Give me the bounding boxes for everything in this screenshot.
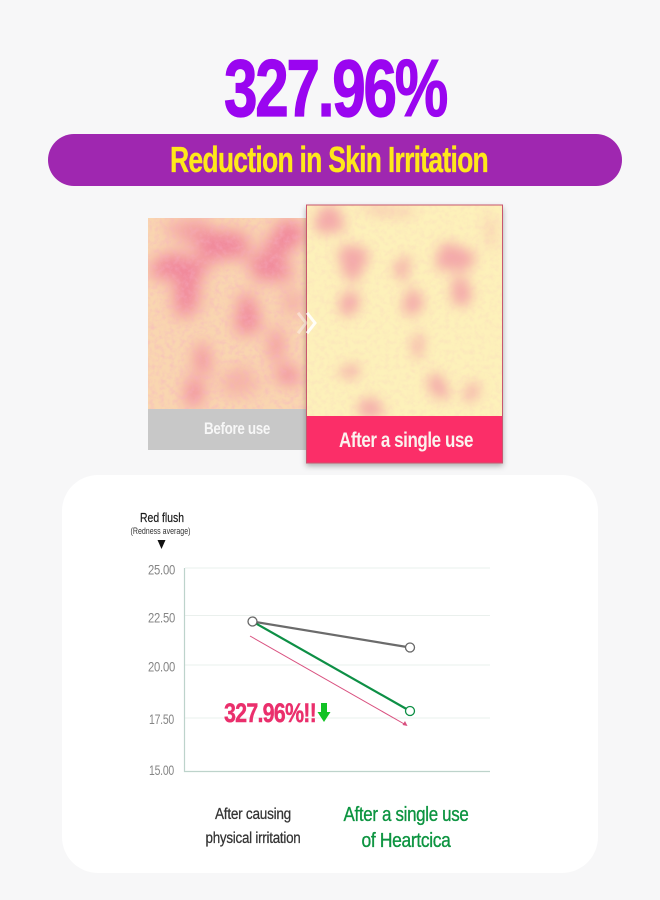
- axes: [184, 568, 490, 772]
- after caption: After a single use: [339, 429, 473, 452]
- y axis title: [130, 511, 190, 549]
- banner: reduction in skin irritation: Reduction in Skin Irritation: [170, 139, 488, 180]
- y axis labels: 15.00: [149, 762, 174, 778]
- y axis labels: 17.50: [149, 711, 174, 727]
- series: green: [252, 622, 410, 711]
- grid lines: [185, 568, 490, 718]
- y axis labels: 22.50: [148, 610, 175, 626]
- y axis labels: [148, 562, 175, 778]
- panel: after a single use: [306, 204, 503, 463]
- after photo border: [306, 205, 502, 463]
- after skin photo: [306, 205, 503, 416]
- before caption: Before use: [204, 420, 270, 438]
- y axis labels: 20.00: [148, 658, 175, 674]
- series: gray: [252, 622, 410, 648]
- before caption: [148, 409, 306, 450]
- banner: reduction in skin irritation: [48, 134, 622, 186]
- before skin photo: [148, 218, 306, 409]
- x label: after causing physical irritation: After causing: [215, 806, 291, 823]
- icon: green down arrow: [318, 703, 330, 722]
- x label: after causing physical irritation: physical irritation: [206, 830, 300, 847]
- title: 327.96%: 327.96%: [224, 44, 447, 134]
- y axis labels: 25.00: [148, 562, 175, 578]
- y axis title: Red flush: [140, 511, 184, 525]
- x label: after a single use of Heartcica: After a single use: [344, 803, 468, 826]
- y axis title: (Redness average): [130, 526, 190, 536]
- x label: after causing physical irritation: [206, 806, 300, 847]
- panel: before use: [148, 218, 306, 450]
- data points: [248, 617, 414, 716]
- callout: 327.96%!!: 327.96%!!: [224, 698, 316, 728]
- line chart: [148, 562, 490, 778]
- pink trend arrow: [250, 636, 408, 726]
- x label: after a single use of Heartcica: of Heartcica: [362, 829, 451, 852]
- panel: chart card: [62, 475, 598, 873]
- icon: chevron between photos: [299, 314, 315, 332]
- x label: after a single use of Heartcica: [344, 803, 468, 852]
